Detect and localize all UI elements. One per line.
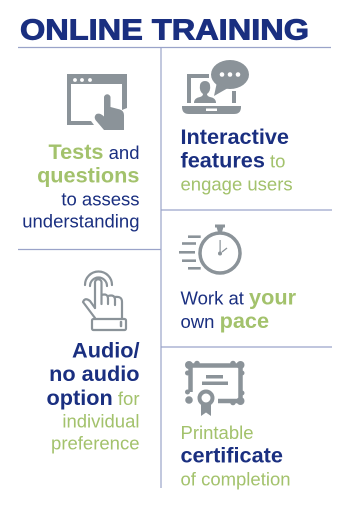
- text: printable certificate: of completion: [180, 468, 291, 489]
- text: tests and questions: Tests and: [48, 139, 140, 164]
- panel: tests and questions: [22, 74, 140, 232]
- icon: touch screen window: [67, 74, 127, 130]
- text: interactive features: engage users: [180, 174, 293, 195]
- text: work at your own pace: Work at your: [180, 284, 297, 310]
- panel: printable certificate: [180, 361, 291, 489]
- icon: certificate: [185, 361, 244, 416]
- text: audio option: option for: [47, 385, 140, 410]
- panel: work at your own pace: [179, 224, 297, 333]
- panel: interactive features: [180, 60, 293, 195]
- text: audio option: Audio/: [72, 337, 140, 362]
- text: audio option: individual: [62, 411, 140, 432]
- icon: stopwatch: [179, 224, 240, 273]
- text: interactive features: [180, 124, 293, 195]
- text: audio option: preference: [51, 432, 140, 453]
- icon: pointing hand with sound arcs: [83, 272, 126, 330]
- text: audio option: [47, 337, 140, 453]
- text: work at your own pace: [180, 284, 297, 333]
- text: work at your own pace: own pace: [180, 308, 269, 333]
- panel: audio option: [47, 272, 140, 453]
- title: ONLINE TRAINING: [20, 14, 309, 46]
- text: tests and questions: [22, 139, 140, 232]
- text: audio option: no audio: [49, 361, 140, 386]
- text: printable certificate: Printable: [180, 422, 254, 443]
- text: printable certificate: [180, 422, 291, 489]
- text: printable certificate: certificate: [180, 443, 283, 468]
- text: tests and questions: understanding: [22, 211, 140, 232]
- text: tests and questions: to assess: [61, 188, 140, 210]
- text: interactive features: features to: [180, 148, 285, 173]
- text: tests and questions: questions: [37, 163, 140, 188]
- text: interactive features: Interactive: [180, 124, 289, 149]
- icon: laptop with speech bubble: [182, 60, 249, 114]
